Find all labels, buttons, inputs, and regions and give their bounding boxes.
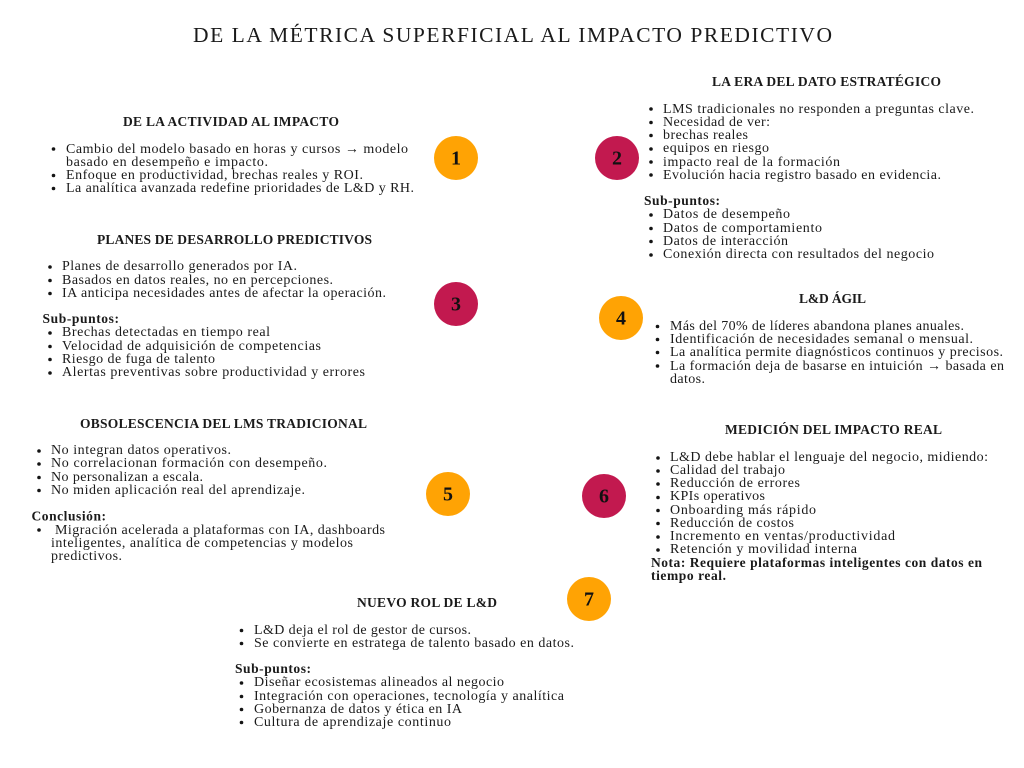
badge 7	[567, 577, 611, 621]
bullet list: datos.	[670, 372, 705, 387]
heading: LA ERA DEL DATO ESTRATÉGICO	[712, 74, 941, 89]
bullet list: Calidad del trabajo	[670, 463, 785, 478]
sub-points	[644, 193, 934, 262]
bullet list: brechas reales	[663, 128, 748, 143]
sub-points: Conexión directa con resultados del negocio	[663, 247, 934, 262]
note	[651, 555, 982, 583]
sub-points	[42, 311, 365, 380]
bullet list: LMS tradicionales no responden a preguntas clave.	[663, 102, 974, 117]
bullet list: La formación deja de basarse en intuición → basada en	[670, 359, 1004, 374]
panel 3: planes de desarrollo predictivos	[42, 232, 386, 380]
badge 4: 4	[616, 308, 626, 330]
bullet list: Onboarding más rápido	[670, 503, 816, 518]
title: DE LA MÉTRICA SUPERFICIAL AL IMPACTO PREDICTIVO	[193, 23, 832, 47]
sub-points: Datos de interacción	[663, 234, 788, 249]
sub-points: Sub-puntos:	[42, 311, 119, 326]
conclusion: Migración acelerada a plataformas con IA, dashboards	[55, 523, 385, 538]
panel 2: la era del dato estratégico	[644, 74, 974, 262]
badge 7: 7	[584, 588, 594, 610]
sub-points: Diseñar ecosistemas alineados al negocio	[254, 675, 504, 690]
heading: L&D ÁGIL	[799, 291, 866, 306]
bullet list: Más del 70% de líderes abandona planes anuales.	[670, 319, 964, 334]
note: Nota: Requiere plataformas inteligentes con datos en	[651, 555, 982, 570]
badge 1: 1	[451, 148, 461, 170]
conclusion: Conclusión:	[32, 508, 106, 524]
bullet list: basado en desempeño e impacto.	[66, 155, 268, 170]
badge 3: 3	[451, 294, 461, 316]
bullet list: KPIs operativos	[670, 489, 765, 504]
bullet list: La analítica permite diagnósticos continuos y precisos.	[670, 345, 1003, 360]
sub-points: Gobernanza de datos y ética en IA	[254, 702, 463, 717]
bullet list: Cambio del modelo basado en horas y cursos → modelo	[66, 142, 408, 157]
sub-points	[235, 661, 565, 730]
bullet list	[37, 443, 327, 498]
heading: DE LA ACTIVIDAD AL IMPACTO	[123, 114, 339, 129]
badge 1	[434, 136, 478, 180]
bullet list: No personalizan a escala.	[51, 470, 203, 485]
bullet list: Enfoque en productividad, brechas reales y ROI.	[66, 168, 363, 183]
bullet list: Reducción de costos	[670, 516, 794, 531]
heading: OBSOLESCENCIA DEL LMS TRADICIONAL	[80, 416, 367, 431]
bullet list: Incremento en ventas/productividad	[670, 529, 895, 544]
badge 6: 6	[599, 486, 609, 508]
sub-points: Datos de desempeño	[663, 207, 790, 222]
badge 3	[434, 282, 478, 326]
bullet list	[52, 142, 414, 196]
bullet list	[649, 102, 974, 183]
sub-points: Alertas preventivas sobre productividad y errores	[62, 365, 365, 380]
bullet list: Planes de desarrollo generados por IA.	[62, 259, 297, 274]
bullet list: L&D debe hablar el lenguaje del negocio, midiendo:	[670, 450, 988, 465]
badge 2	[595, 136, 639, 180]
bullet list: No miden aplicación real del aprendizaje.	[51, 483, 305, 498]
sub-points: Datos de comportamiento	[663, 221, 822, 236]
bullet list: Basados en datos reales, no en percepciones.	[62, 273, 333, 288]
badge 2: 2	[612, 148, 622, 170]
bullet list: Identificación de necesidades semanal o mensual.	[670, 332, 973, 347]
sub-points: Integración con operaciones, tecnología y analítica	[254, 689, 565, 704]
bullet list	[656, 319, 1004, 387]
heading: NUEVO ROL DE L&D	[357, 595, 497, 610]
conclusion: inteligentes, analítica de competencias y modelos	[51, 536, 353, 551]
sub-points: Riesgo de fuga de talento	[62, 352, 215, 367]
bullet list: equipos en riesgo	[663, 141, 769, 156]
bullet list	[48, 259, 386, 301]
heading: MEDICIÓN DEL IMPACTO REAL	[725, 422, 942, 437]
bullet list: Reducción de errores	[670, 476, 800, 491]
panel 7: nuevo rol de L&D	[235, 595, 574, 730]
bullet list: Evolución hacia registro basado en evidencia.	[663, 168, 941, 183]
heading: PLANES DE DESARROLLO PREDICTIVOS	[97, 232, 372, 247]
panel 4: L&D ágil	[656, 291, 1004, 387]
bullet list: IA anticipa necesidades antes de afectar la operación.	[62, 286, 386, 301]
bullet list: Se convierte en estratega de talento basado en datos.	[254, 636, 574, 651]
bullet list: Retención y movilidad interna	[670, 542, 858, 557]
bullet list: impacto real de la formación	[663, 155, 840, 170]
bullet list: No correlacionan formación con desempeño.	[51, 456, 327, 471]
panel 5: obsolescencia del LMS tradicional	[32, 416, 385, 564]
sub-points: Velocidad de adquisición de competencias	[62, 339, 321, 354]
badge 4	[599, 296, 643, 340]
badge 5	[426, 472, 470, 516]
sub-points: Brechas detectadas en tiempo real	[62, 325, 270, 340]
sub-points: Cultura de aprendizaje continuo	[254, 715, 451, 730]
bullet list	[656, 450, 988, 557]
panel 6: medición del impacto real	[651, 422, 988, 583]
conclusion	[32, 508, 385, 564]
bullet list: Necesidad de ver:	[663, 115, 770, 130]
panel 1: de la actividad al impacto	[52, 114, 414, 196]
bullet list: No integran datos operativos.	[51, 443, 231, 458]
sub-points: Sub-puntos:	[644, 193, 720, 208]
bullet list: La analítica avanzada redefine prioridades de L&D y RH.	[66, 181, 414, 196]
bullet list: L&D deja el rol de gestor de cursos.	[254, 623, 471, 638]
sub-points: Sub-puntos:	[235, 661, 311, 676]
badge 5: 5	[443, 484, 453, 506]
note: tiempo real.	[651, 568, 726, 583]
bullet list	[240, 623, 574, 651]
badge 6	[582, 474, 626, 518]
conclusion: predictivos.	[51, 549, 122, 564]
